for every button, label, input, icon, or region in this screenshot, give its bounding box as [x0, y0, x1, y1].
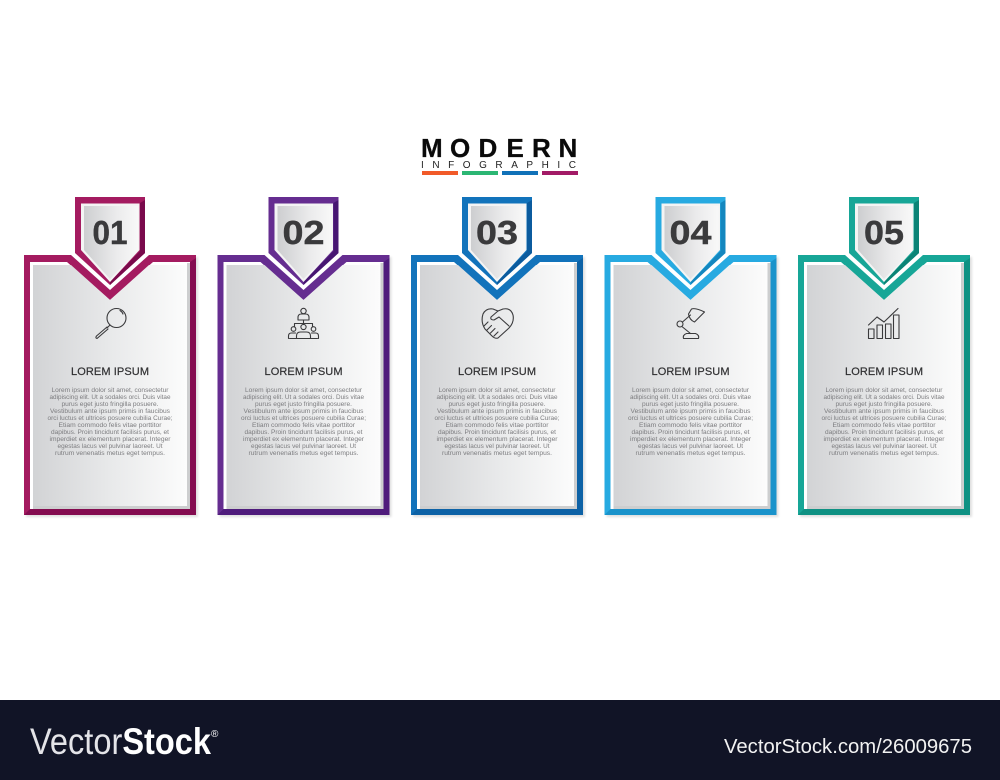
text block 05: egestas lacus vel pulvinar laoreet. Ut — [832, 443, 937, 450]
text block 02: orci luctus et ultrices posuere cubilia Curae; — [241, 415, 366, 422]
title: Modern Infographic: INFOGRAPHIC — [421, 160, 576, 171]
panel: card 03 — [411, 197, 585, 517]
text block 03: dapibus. Proin tincidunt facilisis purus, et — [438, 429, 556, 436]
text block 04: adipiscing elit. Ut a sodales orci. Duis vitae — [630, 394, 751, 401]
text block 04: Lorem ipsum dolor sit amet, consectetur — [632, 387, 750, 394]
pointer badge 01 — [75, 197, 145, 285]
text block 02: Vestibulum ante ipsum primis in faucibus — [244, 408, 364, 415]
panel: card 05 — [798, 197, 972, 517]
text block 03: imperdiet ex elementum placerat. Integer — [436, 436, 558, 443]
text block 04: dapibus. Proin tincidunt facilisis purus, et — [632, 429, 750, 436]
text block 02: Etiam commodo felis vitae porttitor — [252, 422, 356, 429]
number 05: 05 — [864, 214, 904, 251]
text block 04: purus eget justo fringilla posuere. — [642, 401, 739, 408]
text block 01: Etiam commodo felis vitae porttitor — [58, 422, 162, 429]
text block 03: rutrum venenatis metus eget tempus. — [442, 450, 552, 457]
number 01: 01 — [92, 214, 128, 251]
text block 01: dapibus. Proin tincidunt facilisis purus, et — [51, 429, 169, 436]
heading 05: LOREM IPSUM — [845, 366, 923, 378]
text block 03: orci luctus et ultrices posuere cubilia Curae; — [434, 415, 560, 422]
text block 04: Vestibulum ante ipsum primis in faucibus — [630, 408, 751, 415]
text block 01: orci luctus et ultrices posuere cubilia Curae; — [48, 415, 173, 422]
text block 01: imperdiet ex elementum placerat. Integer — [50, 436, 171, 443]
text block 04: rutrum venenatis metus eget tempus. — [636, 450, 746, 457]
text block 03: egestas lacus vel pulvinar laoreet. Ut — [444, 443, 550, 450]
text block 05: dapibus. Proin tincidunt facilisis purus, et — [825, 429, 943, 436]
footer: VectorStock bar — [0, 700, 1000, 780]
pointer badge 03 — [462, 197, 532, 285]
text block 04: orci luctus et ultrices posuere cubilia Curae; — [628, 415, 753, 422]
text block 05: rutrum venenatis metus eget tempus. — [829, 450, 939, 457]
text block 02: purus eget justo fringilla posuere. — [255, 401, 352, 408]
text block 03: Lorem ipsum dolor sit amet, consectetur — [438, 387, 556, 394]
icon: team hierarchy — [288, 308, 318, 338]
text block 02: Lorem ipsum dolor sit amet, consectetur — [245, 387, 363, 394]
icon: growth chart — [868, 308, 899, 338]
text block 02: imperdiet ex elementum placerat. Integer — [243, 436, 365, 443]
pointer badge 02 — [268, 197, 338, 285]
number 04: 04 — [670, 214, 712, 251]
text block 01: egestas lacus vel pulvinar laoreet. Ut — [58, 443, 163, 450]
registered mark: ® — [211, 729, 219, 740]
panel: card 02 — [218, 197, 392, 517]
number 03: 03 — [476, 214, 518, 251]
text block 02: adipiscing elit. Ut a sodales orci. Duis vitae — [243, 394, 364, 401]
heading 01: LOREM IPSUM — [71, 366, 149, 378]
text block 04: Etiam commodo felis vitae porttitor — [639, 422, 743, 429]
title: Modern Infographic: MODERN — [421, 133, 577, 163]
text block 01: rutrum venenatis metus eget tempus. — [55, 450, 165, 457]
text block 01: Lorem ipsum dolor sit amet, consectetur — [52, 387, 169, 394]
heading 04: LOREM IPSUM — [652, 366, 730, 378]
text block 03 — [434, 387, 560, 457]
text block 05: orci luctus et ultrices posuere cubilia Curae; — [822, 415, 947, 422]
panel: card 01 — [24, 197, 198, 517]
text block 05: Etiam commodo felis vitae porttitor — [832, 422, 936, 429]
text block 01: adipiscing elit. Ut a sodales orci. Duis vitae — [50, 394, 171, 401]
text block 03: Etiam commodo felis vitae porttitor — [446, 422, 549, 429]
number 02: 02 — [282, 214, 324, 251]
text block 01 — [48, 387, 173, 457]
text block 05: imperdiet ex elementum placerat. Integer — [824, 436, 945, 443]
text block 02: egestas lacus vel pulvinar laoreet. Ut — [251, 443, 356, 450]
heading 02: LOREM IPSUM — [264, 366, 342, 378]
text block 05: purus eget justo fringilla posuere. — [836, 401, 933, 408]
panel: card 04 — [604, 197, 778, 517]
text block 01: Vestibulum ante ipsum primis in faucibus — [50, 408, 171, 415]
pointer badge 04 — [656, 197, 726, 285]
text block 02: rutrum venenatis metus eget tempus. — [248, 450, 359, 457]
text block 03: adipiscing elit. Ut a sodales orci. Duis vitae — [436, 394, 558, 401]
text block 04: imperdiet ex elementum placerat. Integer — [630, 436, 752, 443]
text block 04 — [628, 387, 753, 457]
text block 04: egestas lacus vel pulvinar laoreet. Ut — [638, 443, 743, 450]
icon: desk lamp — [677, 309, 704, 338]
text block 05: Vestibulum ante ipsum primis in faucibus — [824, 408, 945, 415]
pointer badge 05 — [849, 197, 919, 285]
text block 03: Vestibulum ante ipsum primis in faucibus — [437, 408, 558, 415]
footer logo: VectorStock — [30, 721, 211, 762]
text block 02: dapibus. Proin tincidunt facilisis purus, et — [244, 429, 363, 436]
text block 03: purus eget justo fringilla posuere. — [448, 401, 546, 408]
text block 02 — [241, 387, 366, 457]
text block 01: purus eget justo fringilla posuere. — [62, 401, 159, 408]
text block 05 — [822, 387, 947, 457]
icon: magnifier — [96, 308, 126, 338]
footer image id: VectorStock.com/26009675 — [724, 736, 972, 758]
text block 05: adipiscing elit. Ut a sodales orci. Duis vitae — [824, 394, 945, 401]
text block 05: Lorem ipsum dolor sit amet, consectetur — [826, 387, 943, 394]
heading 03: LOREM IPSUM — [458, 366, 536, 378]
icon: handshake — [482, 309, 513, 338]
